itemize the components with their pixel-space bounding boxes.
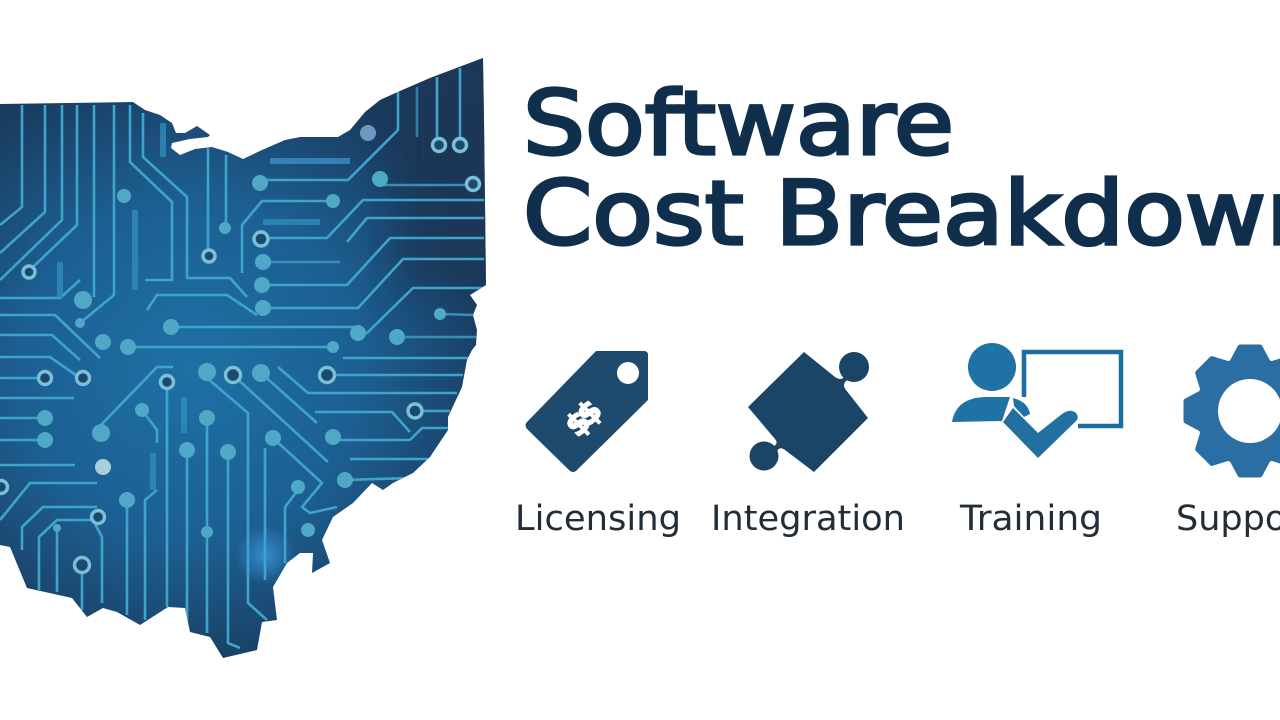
labels: Integration (711, 499, 905, 539)
icon: trainer with board and check (952, 343, 1121, 458)
icon: gear (1186, 347, 1280, 475)
labels: Training (959, 499, 1102, 539)
icon: puzzle piece (748, 352, 869, 472)
icon: price tag: $$ (559, 394, 608, 444)
labels: Licensing (515, 499, 681, 539)
icon: price tag (526, 351, 648, 472)
title: Software (523, 72, 954, 175)
title: Cost Breakdown (523, 162, 1280, 265)
map: Ohio circuit board silhouette (0, 50, 510, 670)
title (523, 72, 1280, 265)
labels (515, 499, 1280, 539)
